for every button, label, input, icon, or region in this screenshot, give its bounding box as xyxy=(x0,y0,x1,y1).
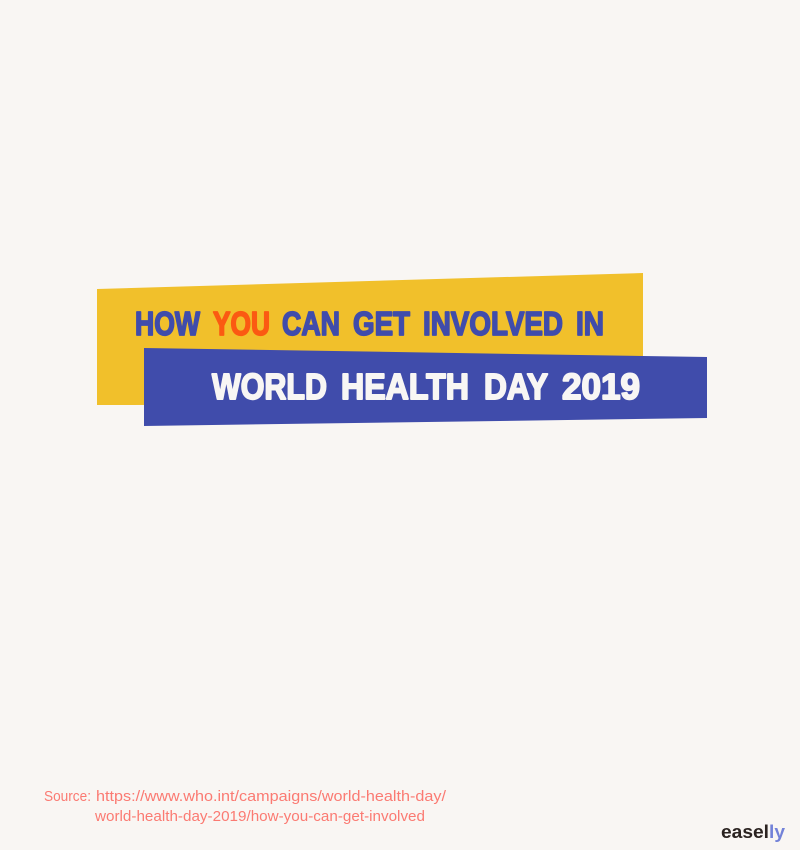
heading: how you can get involved in: GET xyxy=(353,305,410,342)
heading: how you can get involved in: CAN xyxy=(282,305,340,342)
heading: world health day 2019: WORLD xyxy=(212,366,327,407)
panel: blue banner xyxy=(144,348,707,426)
logo: easelly: easelly xyxy=(721,822,785,842)
heading: world health day 2019: 2019 xyxy=(562,366,640,407)
heading: world health day 2019 xyxy=(212,366,640,407)
panel: yellow banner xyxy=(97,273,643,405)
source citation: world-health-day-2019/how-you-can-get-involved xyxy=(94,808,425,825)
heading: how you can get involved in: INVOLVED xyxy=(423,305,563,342)
heading: how you can get involved in: IN xyxy=(576,305,604,342)
heading: world health day 2019: DAY xyxy=(484,366,548,407)
source citation: https://www.who.int/campaigns/world-health-day/ xyxy=(96,788,447,805)
source citation xyxy=(44,788,447,825)
source citation: Source: xyxy=(44,789,91,805)
heading: world health day 2019: HEALTH xyxy=(341,366,469,407)
heading: how you can get involved in: YOU xyxy=(213,305,270,342)
heading: how you can get involved in: HOW xyxy=(135,305,201,342)
heading: how you can get involved in xyxy=(135,305,604,342)
